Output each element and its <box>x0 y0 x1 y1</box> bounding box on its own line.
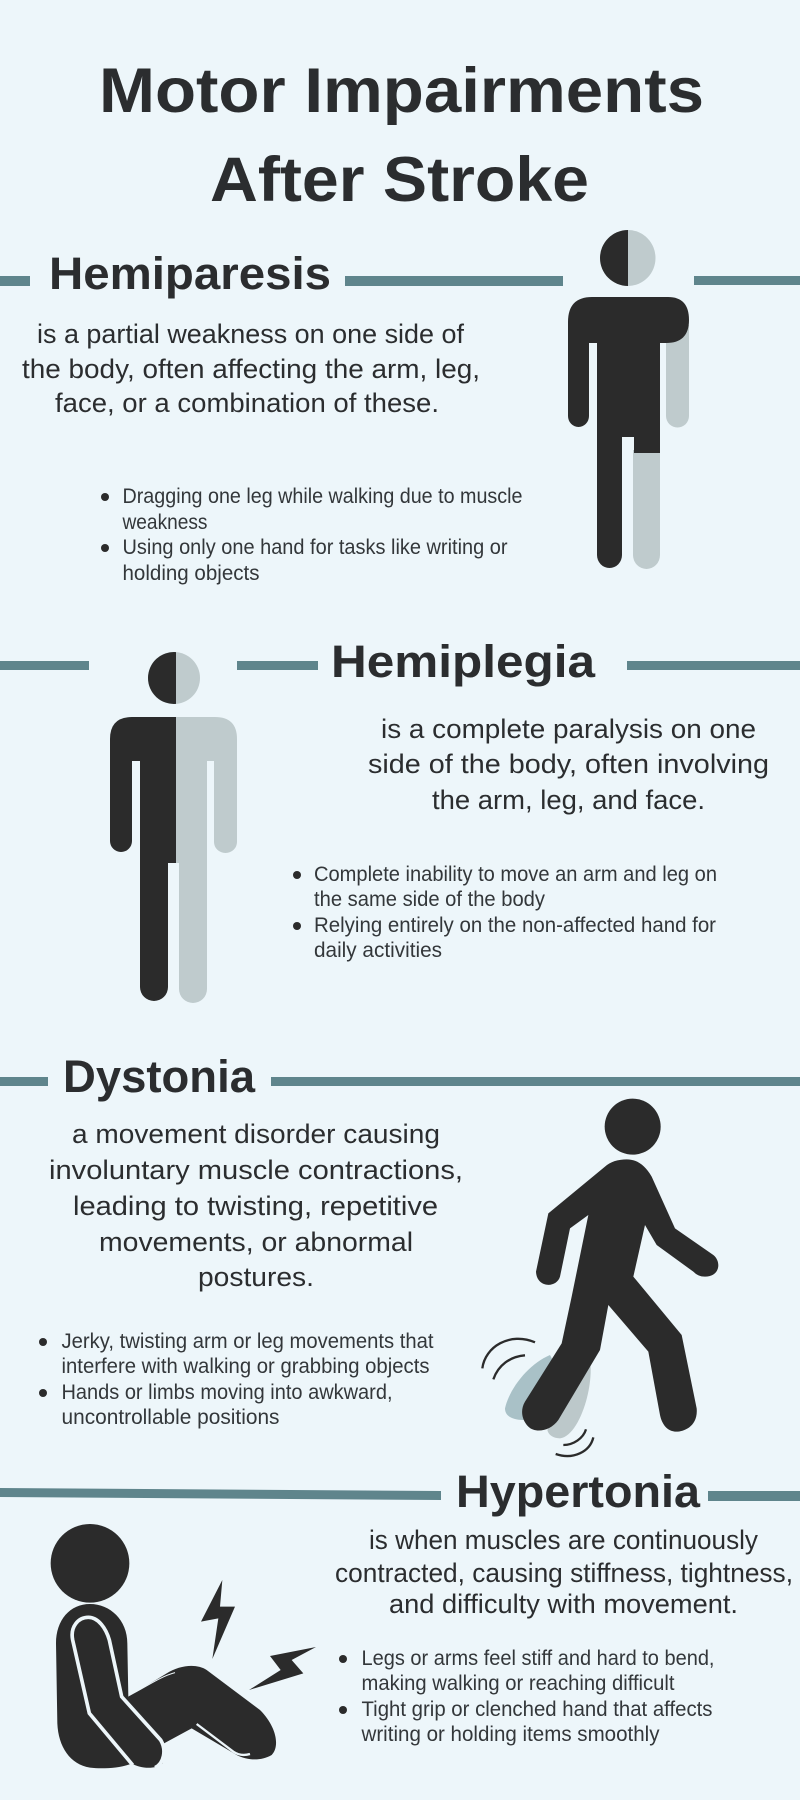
list: dystonia symptoms: Hands or limbs moving into awkward, <box>62 1381 392 1404</box>
list: hypertonia symptoms: Tight grip or clenched hand that affects <box>362 1698 712 1721</box>
heading: hemiparesis: Hemiparesis <box>49 248 331 299</box>
icon: walking figure with twisting foot <box>482 1099 718 1456</box>
list: dystonia symptoms: Jerky, twisting arm or leg movements that <box>62 1330 434 1353</box>
title <box>99 56 704 215</box>
text: dystonia definition: movements, or abnormal <box>99 1227 413 1257</box>
heading: dystonia: Dystonia <box>63 1051 256 1102</box>
list: hypertonia symptoms <box>339 1647 714 1746</box>
panel: hemiplegia <box>0 636 800 1003</box>
icon: seated figure with stiff leg and lightning bolts <box>51 1524 316 1768</box>
list: hypertonia symptoms: writing or holding items smoothly <box>361 1723 660 1746</box>
list: hemiparesis symptoms: weakness <box>122 511 208 534</box>
list: hemiplegia symptoms: Complete inability to move an arm and leg on <box>314 863 717 886</box>
title: After Stroke <box>210 145 589 215</box>
text: dystonia definition: postures. <box>198 1262 314 1292</box>
text: hemiplegia definition: side of the body, often involving <box>368 749 769 779</box>
text: hemiplegia definition: the arm, leg, and face. <box>432 785 705 815</box>
text: hemiparesis definition: the body, often affecting the arm, leg, <box>22 354 480 384</box>
list: hemiplegia symptoms <box>293 863 717 962</box>
list: hemiparesis symptoms: Using only one hand for tasks like writing or <box>122 536 508 559</box>
icon: partially affected figure <box>568 230 689 569</box>
text: hypertonia definition: and difficulty with movement. <box>389 1589 738 1619</box>
text: hypertonia definition: is when muscles are continuously <box>369 1525 758 1555</box>
list: dystonia symptoms: uncontrollable positions <box>62 1406 280 1429</box>
text: hypertonia definition: contracted, causing stiffness, tightness, <box>335 1558 793 1588</box>
icon: half affected figure <box>110 652 237 1003</box>
panel: dystonia <box>0 1051 800 1456</box>
text: hemiparesis definition: face, or a combination of these. <box>55 388 439 418</box>
panel: hypertonia <box>0 1466 800 1768</box>
text: dystonia definition: a movement disorder causing <box>72 1119 440 1149</box>
text: hemiparesis definition <box>22 319 480 418</box>
list: hemiparesis symptoms: Dragging one leg while walking due to muscle <box>122 485 522 508</box>
list: hemiparesis symptoms: holding objects <box>122 562 260 585</box>
heading: hypertonia: Hypertonia <box>456 1466 701 1517</box>
list: hemiparesis symptoms <box>101 485 522 585</box>
list: hemiplegia symptoms: daily activities <box>314 939 442 962</box>
text: hemiparesis definition: is a partial weakness on one side of <box>37 319 464 349</box>
text: hypertonia definition <box>335 1525 793 1619</box>
list: hypertonia symptoms: making walking or reaching difficult <box>362 1672 675 1695</box>
panel: hemiparesis <box>0 230 800 585</box>
text: dystonia definition: involuntary muscle contractions, <box>49 1155 463 1185</box>
list: hypertonia symptoms: Legs or arms feel stiff and hard to bend, <box>362 1647 714 1670</box>
list: hemiplegia symptoms: the same side of the body <box>314 888 545 911</box>
text: hemiplegia definition: is a complete paralysis on one <box>381 714 756 744</box>
list: dystonia symptoms: interfere with walking or grabbing objects <box>62 1355 430 1378</box>
list: dystonia symptoms <box>39 1330 434 1429</box>
text: dystonia definition <box>49 1119 463 1292</box>
heading: hemiplegia: Hemiplegia <box>331 636 596 687</box>
text: dystonia definition: leading to twisting, repetitive <box>73 1191 438 1221</box>
text: hemiplegia definition <box>368 714 769 815</box>
title: Motor Impairments <box>99 56 704 126</box>
list: hemiplegia symptoms: Relying entirely on the non-affected hand for <box>314 914 716 937</box>
